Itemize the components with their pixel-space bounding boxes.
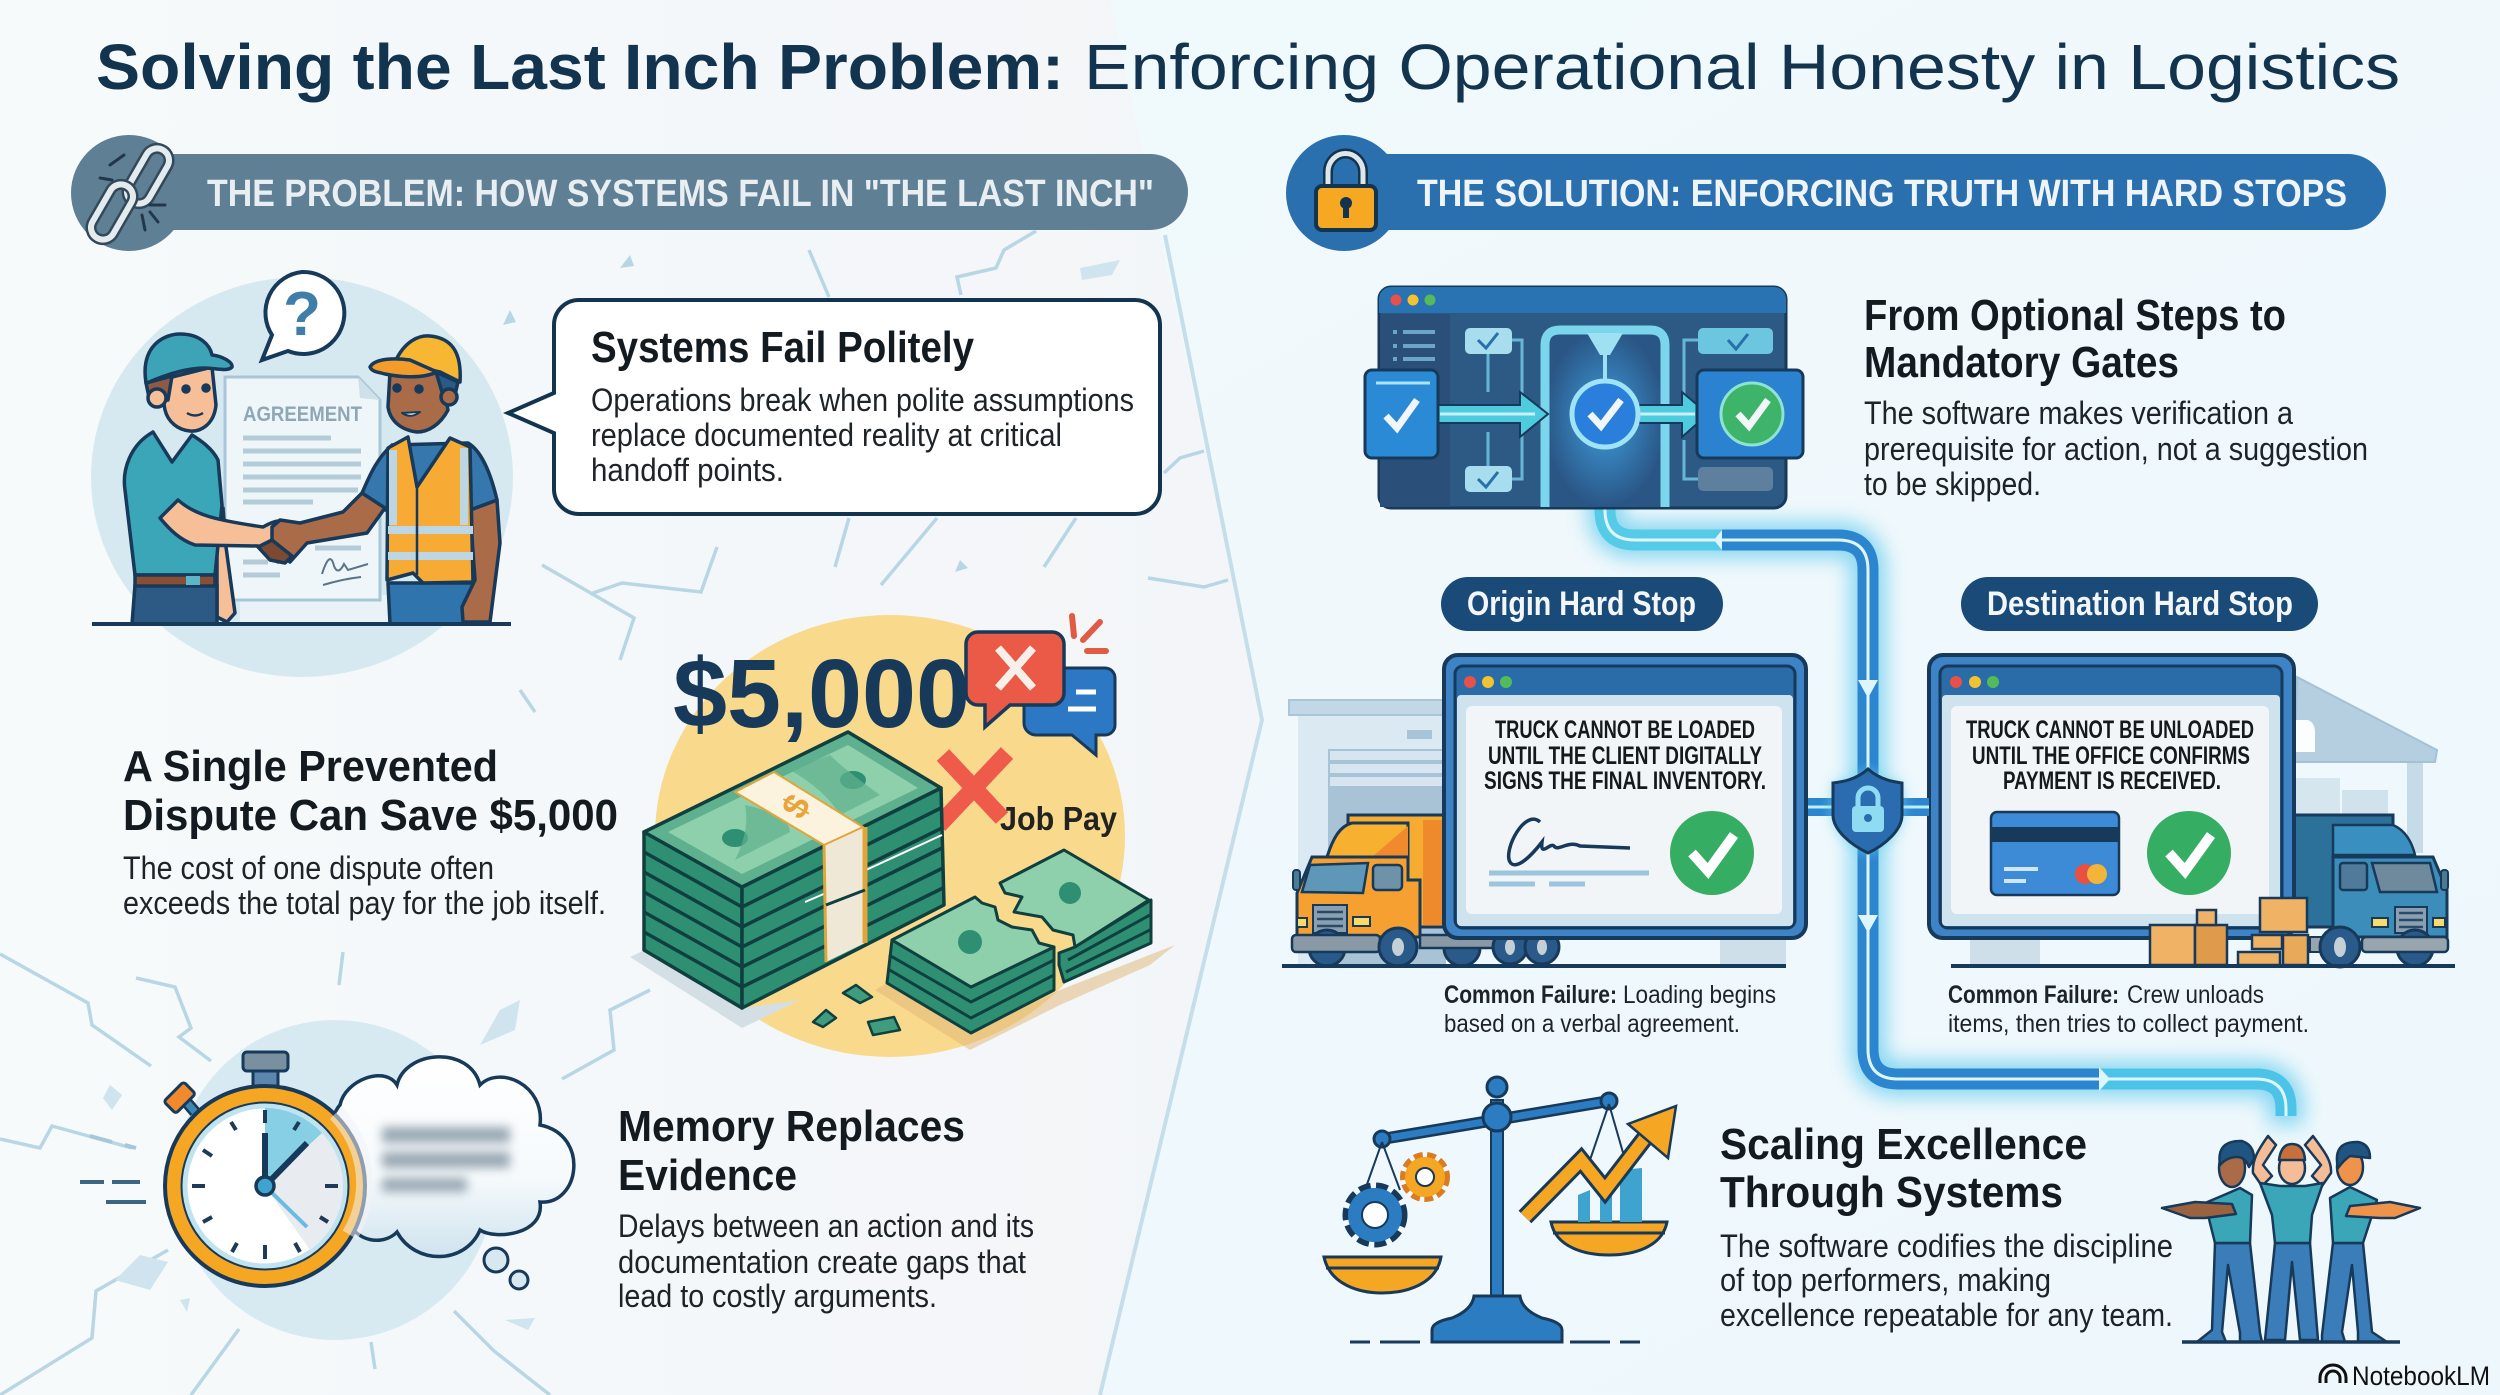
left pan <box>1324 1257 1441 1293</box>
text: scaling excellence: Scaling Excellence <box>1720 1120 2087 1169</box>
right worker <box>2322 1142 2420 1342</box>
icon: red x bubble <box>966 616 1106 727</box>
text: memory replaces evidence: lead to costly arguments. <box>618 1278 937 1314</box>
text: common failure destination <box>1948 981 2309 1038</box>
text: a single prevented dispute: exceeds the total pay for the job itself. <box>123 885 606 921</box>
text: a single prevented dispute: A Single Prevented <box>123 742 498 791</box>
text: common failure origin: based on a verbal agreement. <box>1444 1010 1740 1038</box>
text: from optional steps: The software makes verification a <box>1864 395 2293 431</box>
icon: security shield <box>1808 769 1929 853</box>
illustration: team of three workers <box>2162 1136 2420 1342</box>
panel: origin hard stop screen: UNTIL THE CLIENT DIGITALLY <box>1488 742 1762 770</box>
callout: systems fail politely: handoff points. <box>591 452 784 488</box>
document: agreement <box>225 377 388 624</box>
text: scaling excellence: The software codifies the discipline <box>1720 1228 2173 1264</box>
text: a single prevented dispute: The cost of one dispute often <box>123 850 494 886</box>
text: common failure origin <box>1444 981 1776 1038</box>
text: common failure destination: items, then tries to collect payment. <box>1948 1010 2309 1038</box>
bars and growth arrow <box>1525 1106 1676 1222</box>
title: Solving the Last Inch Problem: <box>96 31 1064 103</box>
text: from optional steps: From Optional Steps to <box>1864 291 2286 340</box>
illustration: balance scale <box>1324 1077 1676 1342</box>
panel: origin hard stop screen <box>1444 655 1806 938</box>
text: common failure destination: Common Failure: <box>1948 981 2119 1009</box>
text: from optional steps <box>1864 291 2368 502</box>
icon: signature <box>1489 819 1649 884</box>
pill: origin hard stop <box>1441 577 1723 631</box>
text: memory replaces evidence: Delays between an action and its <box>618 1208 1034 1244</box>
text: memory replaces evidence: Evidence <box>618 1151 797 1200</box>
text: memory replaces evidence: Memory Replaces <box>618 1102 965 1151</box>
illustration: handshake over agreement <box>91 272 513 677</box>
scene: warehouse and blue truck <box>1970 677 2448 967</box>
icon: question bubble: ? <box>283 280 321 349</box>
text: memory replaces evidence: documentation create gaps that <box>618 1244 1026 1280</box>
icon: blue message bubble <box>1024 668 1115 755</box>
text: scaling excellence: Through Systems <box>1720 1168 2063 1217</box>
panel: origin hard stop screen: TRUCK CANNOT BE LOADED <box>1495 716 1755 744</box>
text: scaling excellence: of top performers, making <box>1720 1262 2051 1298</box>
label: job pay: Job Pay <box>1000 800 1118 837</box>
panel header: the problem <box>71 135 1188 251</box>
callout: systems fail politely <box>508 300 1160 514</box>
ground lines <box>1282 964 2455 968</box>
panel: destination hard stop screen: TRUCK CANNOT BE UNLOADED <box>1966 716 2254 744</box>
icon: thought cloud <box>328 1057 574 1289</box>
text: common failure origin: Common Failure: <box>1444 981 1617 1009</box>
illustration: workflow dashboard <box>1365 287 1803 508</box>
callout: systems fail politely: Operations break when polite assumptions <box>591 382 1134 418</box>
money stack: large: $ <box>773 787 818 825</box>
text: scaling excellence: excellence repeatable for any team. <box>1720 1297 2173 1333</box>
panel: origin hard stop screen: SIGNS THE FINAL INVENTORY. <box>1484 767 1766 795</box>
connector: glowing pipeline <box>1605 446 2286 1125</box>
figure: $5,000: $5,000 <box>673 639 970 748</box>
panel header: the solution <box>1286 135 2386 251</box>
person: left worker <box>124 334 307 624</box>
icon: boxes <box>2150 898 2308 965</box>
icon: big red x <box>939 753 1007 825</box>
icon: green check <box>1670 811 1754 895</box>
pill: origin hard stop: Origin Hard Stop <box>1467 585 1696 623</box>
icon: padlock <box>1316 153 1376 230</box>
scene: warehouse and orange truck <box>1289 700 1786 966</box>
panel header: the solution: THE SOLUTION: ENFORCING TRUTH WITH HARD STOPS <box>1417 173 2347 215</box>
pill: destination hard stop: Destination Hard Stop <box>1987 585 2293 623</box>
text: a single prevented dispute: Dispute Can Save $5,000 <box>123 791 618 840</box>
icon: broken chain <box>87 144 173 244</box>
text: common failure origin: Loading begins <box>1623 981 1776 1009</box>
text: from optional steps: prerequisite for action, not a suggestion <box>1864 431 2368 467</box>
panel: destination hard stop screen <box>1929 655 2294 938</box>
right pan <box>1551 1222 1667 1255</box>
icon: green check <box>2147 811 2231 895</box>
illustration: money stacks and dispute <box>630 615 1175 1057</box>
arrows <box>1438 392 1708 437</box>
center worker <box>2253 1136 2331 1340</box>
title <box>96 31 2400 103</box>
illustration: stopwatch and blurred memory cloud <box>80 1020 574 1340</box>
title: Enforcing Operational Honesty in Logistics <box>1084 31 2400 103</box>
text: from optional steps: to be skipped. <box>1864 466 2041 502</box>
text: scaling excellence <box>1720 1120 2173 1333</box>
callout: systems fail politely: Systems Fail Politely <box>591 323 974 372</box>
left worker <box>2162 1141 2262 1342</box>
text: a single prevented dispute <box>123 742 618 921</box>
person: right worker <box>258 336 500 624</box>
panel: destination hard stop screen: UNTIL THE OFFICE CONFIRMS <box>1972 742 2250 770</box>
crack lines background <box>0 231 1228 1395</box>
icon: credit card <box>1991 812 2119 895</box>
document: agreement: AGREEMENT <box>243 403 362 426</box>
icon: stopwatch <box>80 1052 365 1286</box>
money stack: torn small <box>813 850 1151 1035</box>
panel header: the problem: THE PROBLEM: HOW SYSTEMS FAIL IN "THE LAST INCH" <box>207 173 1154 215</box>
pill: destination hard stop <box>1961 577 2318 631</box>
panel: destination hard stop screen: PAYMENT IS RECEIVED. <box>2003 767 2221 795</box>
text: memory replaces evidence <box>618 1102 1034 1314</box>
gears <box>1348 1157 1445 1242</box>
icon: question bubble <box>262 272 344 360</box>
text: common failure destination: Crew unloads <box>2127 981 2264 1009</box>
callout: systems fail politely: replace documented reality at critical <box>591 417 1062 453</box>
money stack: large <box>644 732 944 1008</box>
text: from optional steps: Mandatory Gates <box>1864 338 2179 387</box>
